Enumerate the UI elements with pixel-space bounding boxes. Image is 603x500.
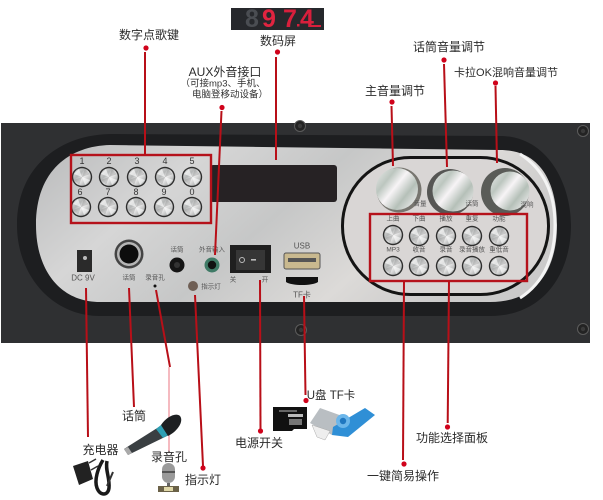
- callout: karaoke reverb volume: 卡拉OK混响音量调节: [454, 65, 558, 79]
- callout: function panel: 功能选择面板: [416, 431, 488, 445]
- AUX socket: 外音输入: [199, 244, 226, 254]
- DC power jack: [71, 250, 95, 282]
- callout: one key operation: [367, 281, 439, 483]
- callout: microphone volume: 话筒音量调节: [413, 39, 485, 54]
- panel: number song keys: 7: [105, 187, 111, 197]
- volume knobs: [376, 168, 534, 216]
- small mic socket: [170, 244, 184, 272]
- microphone jack: [114, 240, 144, 282]
- image: digital display readout: 4: [300, 5, 314, 33]
- AUX socket: [199, 244, 226, 272]
- icon: charger: [73, 459, 113, 494]
- callout: USB and TF card: U盘 TF卡: [307, 388, 355, 402]
- panel: function keys: 功能: [492, 214, 506, 222]
- DC power jack: DC 9V: [71, 274, 95, 282]
- panel: function keys: MP3: [386, 246, 400, 254]
- indicator light: [188, 281, 221, 291]
- panel: number song keys: 4: [162, 156, 168, 166]
- panel: number song keys: 2: [106, 156, 112, 166]
- panel: function keys: 重低音: [489, 244, 509, 254]
- callout: microphone volume: [413, 39, 485, 167]
- volume knobs: 话筒: [466, 198, 479, 208]
- callout: recording hole: [151, 290, 187, 464]
- USB and TF slots: USB: [294, 242, 310, 250]
- panel: function keys: 重复: [466, 214, 479, 222]
- panel: number song keys: 3: [134, 156, 140, 166]
- image: digital display readout: 7: [283, 5, 297, 33]
- callout: recording hole: 录音孔: [151, 449, 187, 464]
- power switch: [230, 245, 271, 284]
- panel: number song keys: 5: [189, 156, 195, 166]
- image: digital display readout: 9: [262, 5, 276, 33]
- image: digital display readout: 8: [245, 5, 259, 33]
- power switch: 关: [230, 274, 237, 284]
- panel: function keys: 上曲: [386, 214, 400, 222]
- callout: charger: 充电器: [82, 442, 119, 457]
- callout: power switch: 电源开关: [235, 436, 283, 450]
- USB and TF slots: [284, 242, 320, 300]
- image: digital display readout: [231, 5, 324, 33]
- panel: function keys: [370, 214, 527, 281]
- callout: digital screen: [260, 33, 296, 160]
- icon: handheld microphone: [124, 415, 181, 455]
- panel: function keys: 录音: [440, 244, 453, 254]
- callout: number song keys: [119, 27, 179, 155]
- callout: one key operation: 一键简易操作: [367, 468, 439, 483]
- callout: main volume: [365, 83, 425, 166]
- power switch: 开: [262, 276, 269, 284]
- digital display window: [210, 165, 337, 202]
- panel: function keys: 下曲: [412, 214, 426, 222]
- callout: microphone: [122, 288, 146, 423]
- panel: number song keys: 1: [79, 156, 85, 166]
- callout: number song keys: 数字点歌键: [119, 27, 179, 42]
- indicator light: 指示灯: [201, 282, 221, 290]
- callout: AUX input: （可接mp3、手机、: [181, 78, 265, 90]
- panel: number song keys: 0: [189, 187, 195, 197]
- volume knobs: 音量: [414, 198, 427, 208]
- callout: digital screen: 数码屏: [260, 33, 296, 48]
- callout: USB and TF card: [303, 296, 355, 403]
- icon: TF memory card: [273, 407, 307, 431]
- recording hole: [145, 272, 165, 288]
- callout: indicator light: 指示灯: [185, 472, 221, 487]
- small mic socket: 话筒: [170, 244, 184, 254]
- recording hole: 录音孔: [145, 272, 165, 282]
- callout: microphone: 话筒: [122, 408, 146, 423]
- panel: function keys: 播放: [440, 214, 453, 222]
- icon: studio microphone: [158, 463, 179, 492]
- panel: function keys: 录音播放: [459, 244, 486, 254]
- panel: number song keys: 8: [133, 187, 139, 197]
- callout: AUX input: 电脑登移动设备）: [192, 88, 268, 100]
- callout: AUX input: [181, 64, 268, 255]
- panel: speaker control panel: [1, 120, 590, 343]
- callout: power switch: [235, 280, 283, 450]
- microphone jack: 话筒: [122, 272, 136, 282]
- callout: function panel: [416, 281, 488, 445]
- volume knobs: 混响: [520, 200, 534, 208]
- callout: AUX input: AUX外音接口: [189, 64, 261, 79]
- panel: number song keys: [71, 155, 211, 223]
- panel: function keys: 收音: [412, 244, 426, 254]
- USB and TF slots: TF卡: [293, 290, 311, 300]
- callout: karaoke reverb volume: [454, 65, 558, 163]
- panel: number song keys: 6: [77, 187, 83, 197]
- callout: indicator light: [185, 295, 221, 487]
- callout: main volume: 主音量调节: [365, 83, 425, 98]
- icon: USB flash drive: [310, 408, 375, 440]
- panel: number song keys: 9: [161, 187, 167, 197]
